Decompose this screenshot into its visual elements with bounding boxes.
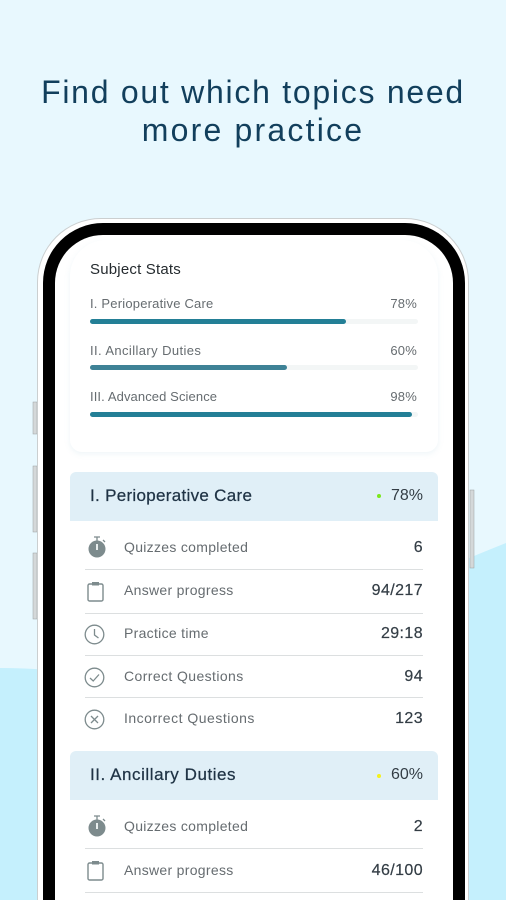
icon: clipboard xyxy=(87,861,104,881)
section header: perioperative care xyxy=(70,472,438,521)
icon: stopwatch xyxy=(88,536,106,558)
progress bar: ancillary xyxy=(90,365,287,370)
row label: Answer progress xyxy=(124,862,234,878)
icon: clipboard xyxy=(87,582,104,602)
progress bar: perioperative xyxy=(90,319,346,324)
row value: 6 xyxy=(414,539,423,556)
icon: check circle xyxy=(84,668,104,688)
progress bar: advanced xyxy=(90,412,412,417)
section header: perioperative care: 78% xyxy=(391,487,423,504)
row label: Correct Questions xyxy=(124,668,244,684)
row label: Practice time xyxy=(124,625,209,641)
row value: 123 xyxy=(395,710,423,727)
row value: 29:18 xyxy=(381,625,423,642)
panel: subject stats xyxy=(70,240,438,452)
row value: 94 xyxy=(404,668,423,685)
title: more practice xyxy=(142,112,364,148)
stat label: advanced: III. Advanced Science xyxy=(90,389,217,404)
section header: ancillary duties: II. Ancillary Duties xyxy=(90,765,236,784)
icon: clock xyxy=(84,624,104,644)
phone frame xyxy=(37,218,469,900)
phone bezel xyxy=(43,223,465,900)
row label: Incorrect Questions xyxy=(124,710,255,726)
row label: Quizzes completed xyxy=(124,539,248,555)
title xyxy=(41,74,465,148)
section header: ancillary duties xyxy=(70,751,438,800)
stat value: ancillary: 60% xyxy=(390,343,417,358)
progress track: perioperative xyxy=(90,319,418,324)
section header: perioperative care: I. Perioperative Care xyxy=(90,486,252,505)
heading: subject stats: Subject Stats xyxy=(90,261,181,278)
row value: 94/217 xyxy=(372,582,423,599)
stat value: advanced: 98% xyxy=(390,389,417,404)
row label: Answer progress xyxy=(124,582,234,598)
title: Find out which topics need xyxy=(41,74,465,110)
row value: 2 xyxy=(414,818,423,835)
icon: stopwatch xyxy=(88,815,106,836)
row label: Quizzes completed xyxy=(124,818,248,834)
stat label: ancillary: II. Ancillary Duties xyxy=(90,343,201,358)
progress track: advanced xyxy=(90,412,418,417)
icon: cross circle xyxy=(84,710,104,730)
stat label: perioperative: I. Perioperative Care xyxy=(90,296,213,311)
section header: ancillary duties: 60% xyxy=(391,766,423,783)
progress track: ancillary xyxy=(90,365,418,370)
row value: 46/100 xyxy=(372,862,423,879)
stat value: perioperative: 78% xyxy=(390,296,417,311)
